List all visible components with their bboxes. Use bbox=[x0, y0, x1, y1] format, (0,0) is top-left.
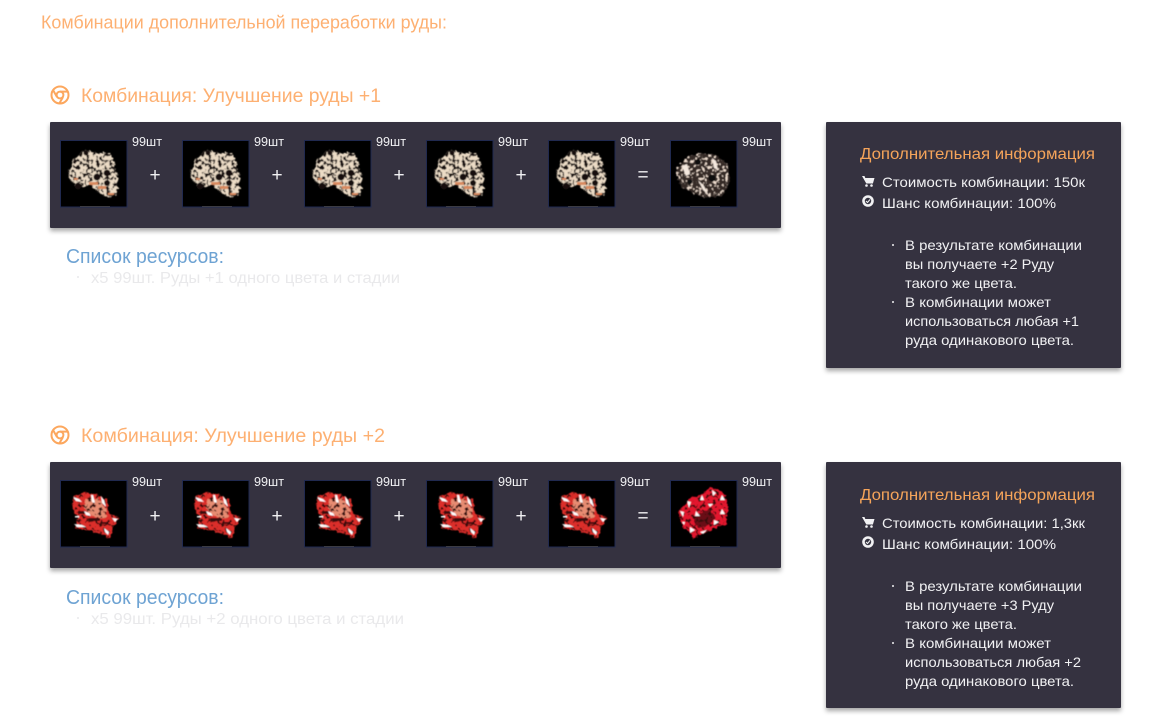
panel: additional info 1: вы получаете +2 Руду bbox=[905, 256, 1054, 272]
operators 1 bbox=[149, 165, 649, 186]
panel: additional info 1: такого же цвета. bbox=[905, 275, 1017, 291]
operators 1: + bbox=[393, 165, 405, 186]
operators 1: = bbox=[637, 165, 649, 186]
icon: section marker 2 bbox=[52, 426, 68, 444]
heading: combination 1: Комбинация: Улучшение руды +1 bbox=[81, 85, 381, 107]
resource list 1: x5 99шт. Руды +1 одного цвета и стадии bbox=[91, 270, 400, 287]
quantity labels 2 bbox=[132, 475, 772, 489]
quantity labels 2: 99шт bbox=[498, 475, 528, 489]
resource list 2 bbox=[66, 587, 404, 628]
operators 1: + bbox=[515, 165, 527, 186]
operators 2: = bbox=[637, 506, 649, 527]
panel: additional info 2: Шанс комбинации: 100% bbox=[882, 536, 1056, 552]
panel: additional info 2: Дополнительная информация bbox=[860, 487, 1095, 504]
quantity labels 1: 99шт bbox=[132, 135, 162, 149]
icon: cart 1 bbox=[862, 176, 874, 187]
panel: additional info 2: В результате комбинации bbox=[905, 578, 1082, 594]
quantity labels 2: 99шт bbox=[376, 475, 406, 489]
operators 2: + bbox=[393, 506, 405, 527]
icon: cart 2 bbox=[862, 517, 874, 528]
section 1: ore upgrade +1 bbox=[50, 85, 1121, 368]
quantity labels 1: 99шт bbox=[498, 135, 528, 149]
quantity labels 1: 99шт bbox=[254, 135, 284, 149]
operators 2: + bbox=[149, 506, 161, 527]
quantity labels 1: 99шт bbox=[742, 135, 772, 149]
panel: additional info 1: использоваться любая +1 bbox=[905, 313, 1079, 329]
panel: additional info 1: В комбинации может bbox=[905, 294, 1052, 310]
panel: additional info 2: использоваться любая +2 bbox=[905, 654, 1081, 670]
icon: section marker 1 bbox=[52, 86, 68, 104]
quantity labels 1: 99шт bbox=[376, 135, 406, 149]
quantity labels 1 bbox=[132, 135, 772, 149]
panel: recipe 2 bbox=[50, 462, 781, 568]
operators 1: + bbox=[149, 165, 161, 186]
resource list 1 bbox=[66, 246, 400, 287]
operators 2: + bbox=[271, 506, 283, 527]
quantity labels 2: 99шт bbox=[742, 475, 772, 489]
section 2: ore upgrade +2 bbox=[50, 425, 1121, 708]
panel: additional info 1 bbox=[826, 122, 1121, 368]
panel: additional info 2: Стоимость комбинации: 1,3кк bbox=[882, 515, 1086, 531]
resource list 1: Список ресурсов: bbox=[66, 246, 224, 268]
icon: chance 2 bbox=[862, 536, 874, 548]
quantity labels 2: 99шт bbox=[132, 475, 162, 489]
panel: additional info 2: руда одинакового цвета. bbox=[905, 673, 1074, 689]
quantity labels 2: 99шт bbox=[254, 475, 284, 489]
quantity labels 2: 99шт bbox=[620, 475, 650, 489]
panel: additional info 2: такого же цвета. bbox=[905, 616, 1017, 632]
panel: additional info 1: Стоимость комбинации: 150к bbox=[882, 174, 1086, 190]
panel: additional info 1: Дополнительная информация bbox=[860, 146, 1095, 163]
item slots 1 bbox=[60, 140, 737, 207]
panel: additional info 1: В результате комбинации bbox=[905, 237, 1082, 253]
operators 2 bbox=[149, 506, 649, 527]
operators 1: + bbox=[271, 165, 283, 186]
panel: additional info 1: руда одинакового цвета. bbox=[905, 332, 1074, 348]
page title: Комбинации дополнительной переработки руды: bbox=[41, 12, 447, 32]
panel: additional info 1: Шанс комбинации: 100% bbox=[882, 195, 1056, 211]
panel: additional info 2 bbox=[826, 462, 1121, 708]
heading: combination 2: Комбинация: Улучшение руды +2 bbox=[81, 425, 385, 447]
icon: chance 1 bbox=[862, 195, 874, 207]
resource list 2: Список ресурсов: bbox=[66, 587, 224, 609]
panel: additional info 2: вы получаете +3 Руду bbox=[905, 597, 1054, 613]
quantity labels 1: 99шт bbox=[620, 135, 650, 149]
panel: recipe 1 bbox=[50, 122, 781, 228]
resource list 2: x5 99шт. Руды +2 одного цвета и стадии bbox=[91, 611, 404, 628]
panel: additional info 2: В комбинации может bbox=[905, 635, 1052, 651]
operators 2: + bbox=[515, 506, 527, 527]
item slots 2 bbox=[60, 480, 737, 547]
